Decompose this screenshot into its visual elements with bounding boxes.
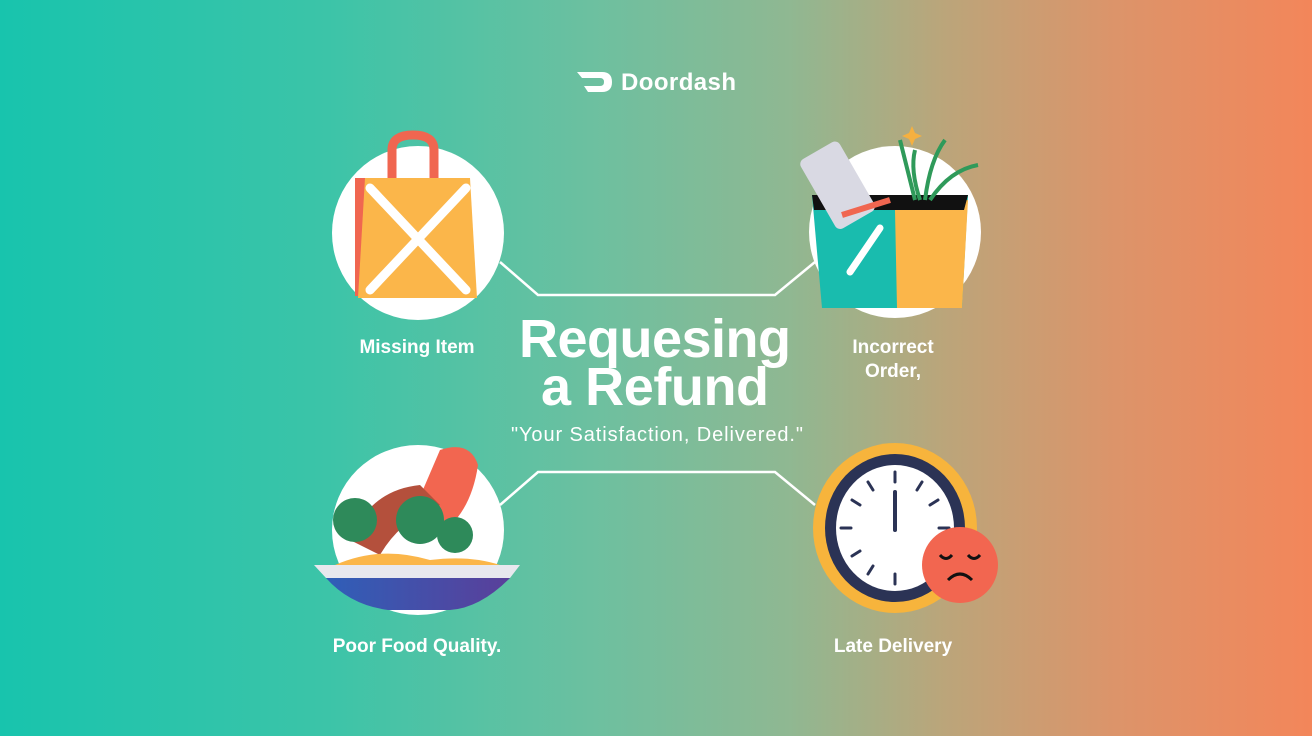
title: a Refund	[541, 357, 769, 417]
label: Poor Food Quality: Poor Food Quality.	[333, 636, 501, 657]
title: Requesing	[519, 309, 791, 369]
icon: poor food quality	[314, 445, 520, 615]
title	[519, 309, 791, 417]
label: Incorrect Order	[852, 337, 934, 382]
label: Incorrect Order: Order,	[865, 361, 921, 382]
icon: late delivery clock	[813, 443, 998, 613]
label: Late Delivery: Late Delivery	[834, 636, 953, 657]
label: Incorrect Order: Incorrect	[852, 337, 934, 358]
icon: incorrect order bag	[798, 126, 981, 318]
label: Missing Item: Missing Item	[359, 337, 475, 358]
subtitle: "Your Satisfaction, Delivered."	[511, 424, 803, 446]
icon: missing item bag	[332, 135, 504, 320]
icon: sad face	[922, 527, 998, 603]
connector lines bottom	[500, 472, 815, 505]
logo: Doordash: Doordash	[621, 69, 736, 96]
connector lines top	[500, 262, 815, 295]
